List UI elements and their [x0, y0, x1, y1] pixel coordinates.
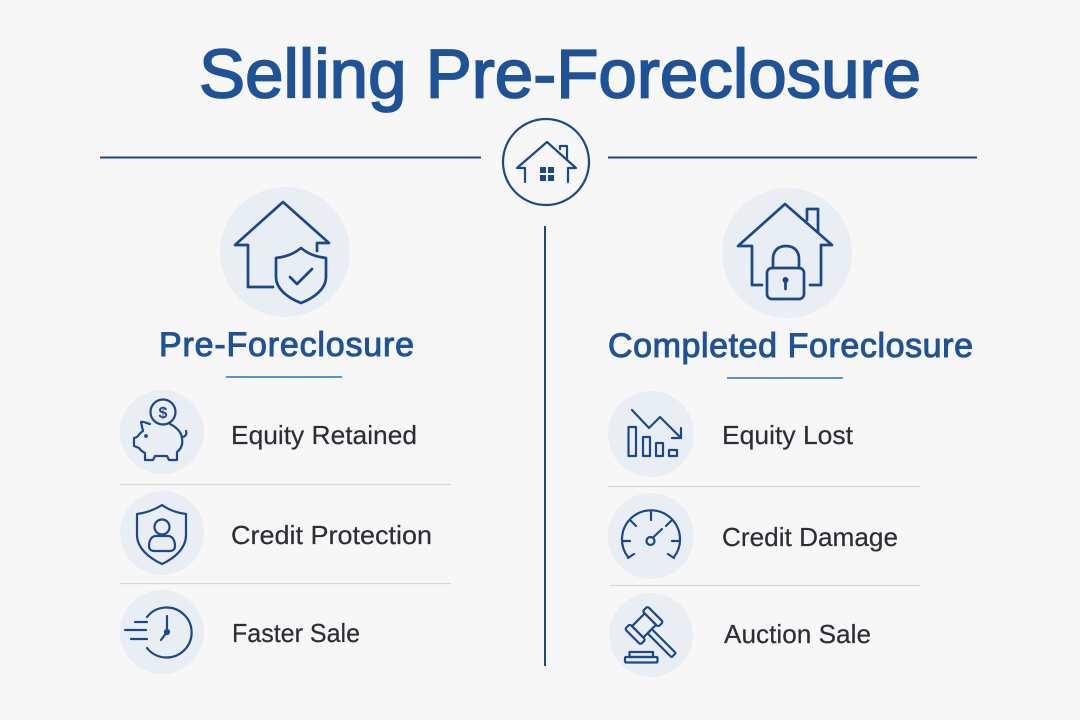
icon: house with padlock	[722, 188, 852, 318]
row: credit damage	[608, 493, 898, 579]
row: equity lost	[608, 391, 854, 477]
label: Equity Lost	[722, 420, 854, 450]
row: auction sale	[609, 593, 871, 677]
center vertical divider	[544, 226, 546, 666]
label: Equity Retained	[231, 420, 417, 450]
icon: header house	[503, 119, 589, 205]
label: Credit Protection	[231, 520, 432, 550]
heading: Completed Foreclosure	[608, 327, 973, 365]
panel: pre-foreclosure	[120, 187, 451, 674]
label: Credit Damage	[722, 522, 898, 552]
header rule: left	[100, 156, 481, 158]
icon: piggy bank	[134, 400, 186, 460]
icon: gauge	[622, 510, 680, 558]
icon: house with shield	[220, 187, 350, 317]
icon: declining chart	[628, 410, 681, 456]
label: Auction Sale	[724, 619, 871, 649]
row: equity retained	[120, 390, 417, 474]
icon: gavel	[625, 606, 685, 667]
panel: completed foreclosure	[608, 188, 973, 677]
icon: piggy bank: $	[159, 405, 168, 422]
heading underline	[226, 376, 342, 378]
label: Faster Sale	[232, 618, 360, 648]
icon: shield with person	[137, 505, 186, 564]
heading underline	[727, 377, 843, 379]
icon: fast clock	[125, 608, 192, 658]
header rule: right	[608, 156, 977, 158]
title: Selling Pre-Foreclosure	[199, 36, 921, 112]
row: credit protection	[120, 491, 432, 575]
heading: Pre-Foreclosure	[159, 326, 414, 364]
row: faster sale	[120, 590, 360, 674]
